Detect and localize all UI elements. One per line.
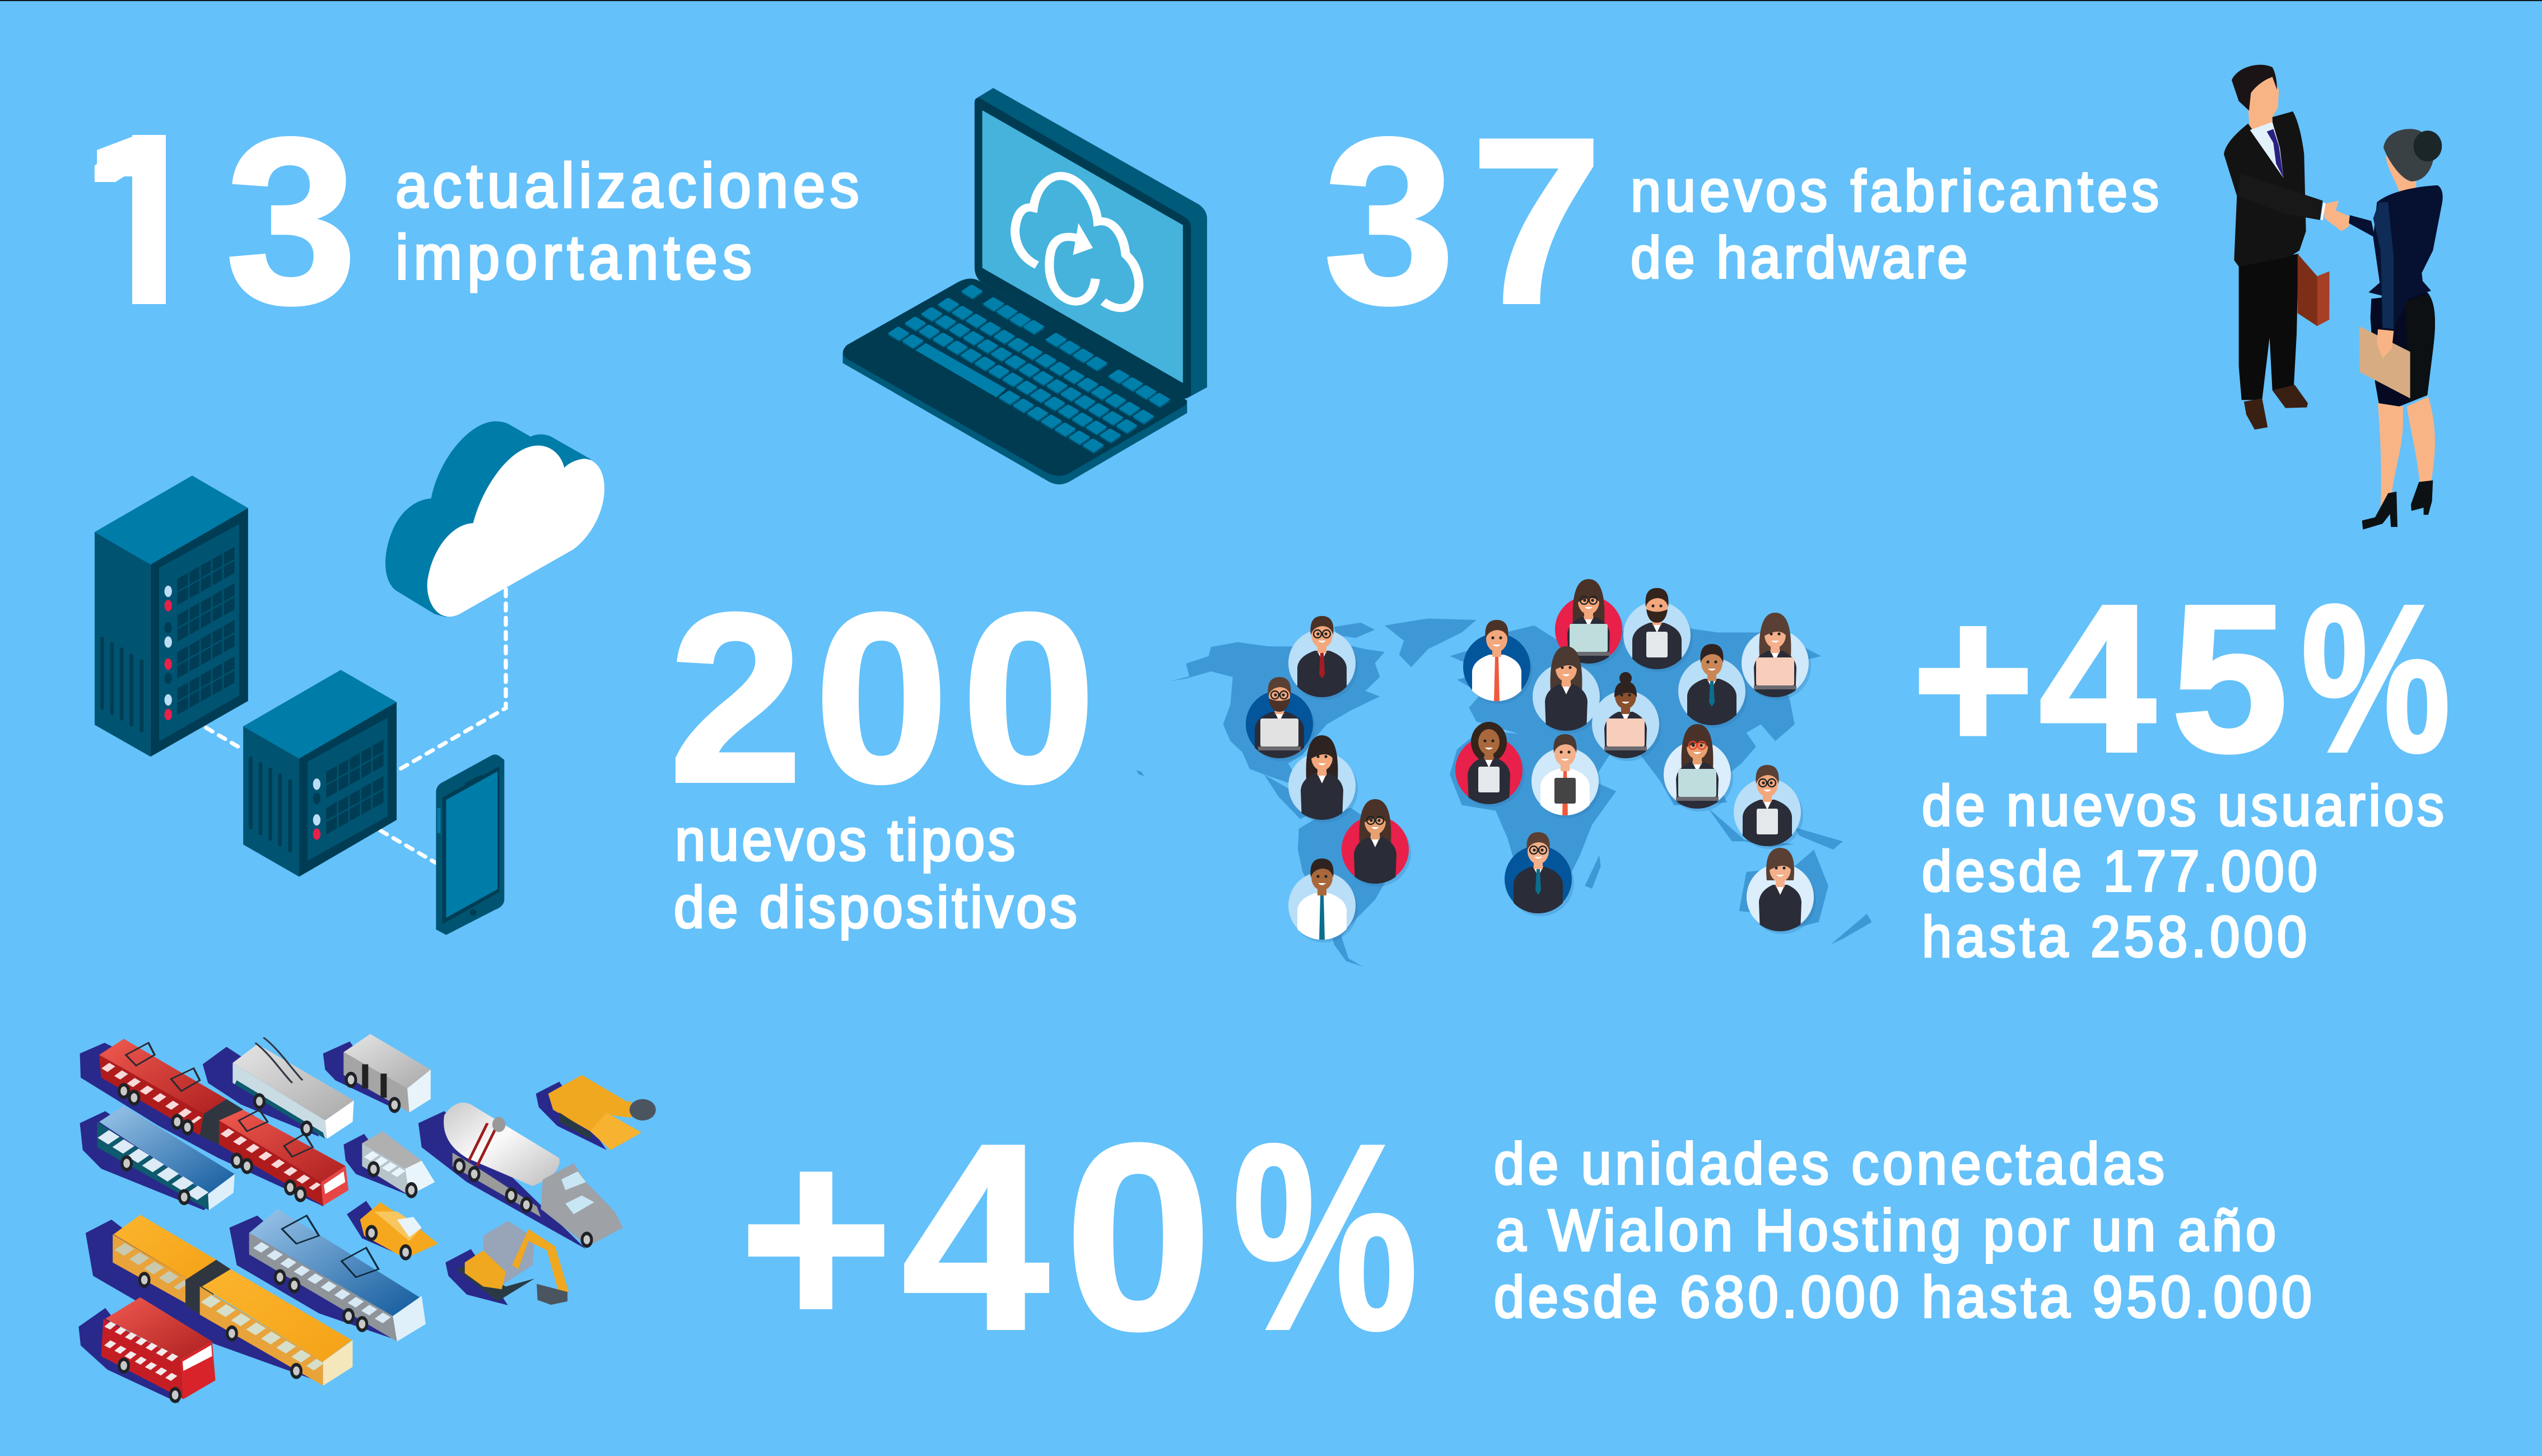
vehicle: excavator bbox=[457, 1221, 569, 1305]
stat: 37 nuevos fabricantes de hardware bbox=[1324, 90, 2159, 353]
person 15: woman red glasses laptop bbox=[1664, 724, 1733, 811]
icon: phone bbox=[436, 754, 504, 935]
vehicle: taxi bbox=[360, 1202, 438, 1261]
person 8: bearded man tablet bbox=[1623, 588, 1693, 672]
vehicle: red articulated tram bbox=[99, 1039, 348, 1206]
caption: de unidades conectadas a Wialon Hosting por un año desde 680.000 hasta 950.000: a Wialon Hosting por un año bbox=[1496, 1198, 2276, 1263]
person 3: woman phone bbox=[1288, 735, 1358, 823]
caption: de nuevos usuarios desde 177.000 hasta 258.000: desde 177.000 bbox=[1922, 839, 2317, 904]
vehicle: blue bus bbox=[97, 1106, 235, 1210]
number +40%: +40 bbox=[739, 1090, 1212, 1385]
person 16: man glasses tablet bbox=[1734, 765, 1803, 849]
caption: de unidades conectadas a Wialon Hosting por un año desde 680.000 hasta 950.000 bbox=[1494, 1131, 2312, 1330]
people on map bbox=[1246, 579, 1816, 942]
vehicle: yellow articulated bus bbox=[113, 1215, 353, 1385]
person 6: man white shirt bbox=[1463, 620, 1533, 704]
cloud refresh glyph bbox=[1015, 176, 1139, 308]
caption: nuevos fabricantes de hardware: de hardware bbox=[1631, 225, 1968, 291]
person 5: man white shirt phone bbox=[1288, 858, 1358, 942]
caption: nuevos tipos de dispositivos: de dispositivos bbox=[674, 875, 1077, 940]
caption: nuevos tipos de dispositivos bbox=[674, 808, 1077, 940]
number +40% bbox=[739, 1090, 1418, 1385]
dashed connectors bbox=[206, 589, 506, 863]
person 7: woman glasses laptop bbox=[1555, 579, 1624, 666]
caption: actualizaciones importantes bbox=[395, 151, 859, 292]
world map bbox=[1136, 618, 1872, 967]
vehicle: blue tram bbox=[249, 1209, 426, 1341]
person 13: woman curly hair bbox=[1455, 722, 1525, 807]
vehicle shadows bbox=[78, 1042, 607, 1403]
illustration: servers, cloud and phone bbox=[95, 421, 604, 935]
caption: de nuevos usuarios desde 177.000 hasta 258.000: de nuevos usuarios bbox=[1922, 774, 2444, 838]
number 200: 200 bbox=[669, 564, 1096, 833]
number 13: 3 bbox=[226, 90, 357, 353]
vehicle: red double-decker bbox=[101, 1298, 216, 1403]
number 13: 1 bbox=[80, 90, 211, 353]
vehicle: van bbox=[362, 1131, 435, 1198]
caption: de unidades conectadas a Wialon Hosting por un año desde 680.000 hasta 950.000: desde 680.000 hasta 950.000 bbox=[1494, 1264, 2312, 1330]
person 10: woman bbox=[1533, 646, 1602, 734]
person 12: man goatee bbox=[1678, 644, 1748, 728]
person 18: woman short hair bbox=[1747, 848, 1816, 934]
number 13 bbox=[94, 135, 350, 307]
caption: de unidades conectadas a Wialon Hosting por un año desde 680.000 hasta 950.000: de unidades conectadas bbox=[1494, 1131, 2164, 1197]
caption: actualizaciones importantes: importantes bbox=[395, 222, 752, 292]
caption: nuevos fabricantes de hardware bbox=[1631, 158, 2159, 291]
icon: small server bbox=[243, 670, 397, 876]
caption: de nuevos usuarios desde 177.000 hasta 258.000: hasta 258.000 bbox=[1922, 905, 2307, 969]
caption: de nuevos usuarios desde 177.000 hasta 258.000 bbox=[1922, 774, 2444, 969]
number 37: 37 bbox=[1324, 90, 1602, 353]
number +40%: % bbox=[1232, 1090, 1418, 1385]
caption: nuevos tipos de dispositivos: nuevos tipos bbox=[675, 808, 1015, 873]
person 9: woman long hair laptop bbox=[1742, 613, 1811, 700]
stat: +45% de nuevos usuarios bbox=[1912, 561, 2451, 969]
man bbox=[2224, 65, 2351, 430]
person 1: man glasses bbox=[1288, 616, 1358, 700]
keyboard bbox=[888, 285, 1170, 454]
caption: nuevos fabricantes de hardware: nuevos fabricantes bbox=[1631, 158, 2159, 224]
number +45% bbox=[1912, 561, 2451, 796]
person 4: woman glasses red bbox=[1342, 799, 1411, 886]
icon: cloud bbox=[385, 421, 604, 617]
woman bbox=[2349, 129, 2443, 530]
number +45%: +45 bbox=[1912, 562, 2288, 796]
stat: +40% de unidades conectadas bbox=[739, 1090, 2312, 1385]
caption: actualizaciones importantes: actualizaciones bbox=[395, 151, 859, 221]
person 14: man white shirt tablet bbox=[1531, 734, 1601, 818]
vehicle: grey bus bbox=[343, 1034, 431, 1113]
stat: 200 nuevos tipos de dispositivos bbox=[669, 564, 1096, 940]
person 11: woman bun laptop bbox=[1592, 672, 1661, 761]
icon: laptop with cloud refresh bbox=[842, 88, 1207, 484]
person 17: man glasses goatee bbox=[1505, 832, 1574, 916]
icon: large server bbox=[95, 475, 248, 757]
vehicle: drill machine bbox=[548, 1075, 656, 1150]
vehicle: silver trolleybus bbox=[232, 1038, 354, 1138]
illustration: fleet of vehicles bbox=[78, 1034, 656, 1403]
vehicle: tanker truck bbox=[444, 1103, 623, 1248]
icon: business handshake bbox=[2224, 65, 2443, 530]
person 2: bearded man laptop bbox=[1246, 677, 1315, 761]
number +45%: % bbox=[2301, 561, 2451, 796]
stat: 13 actualizaciones importantes bbox=[80, 90, 859, 353]
